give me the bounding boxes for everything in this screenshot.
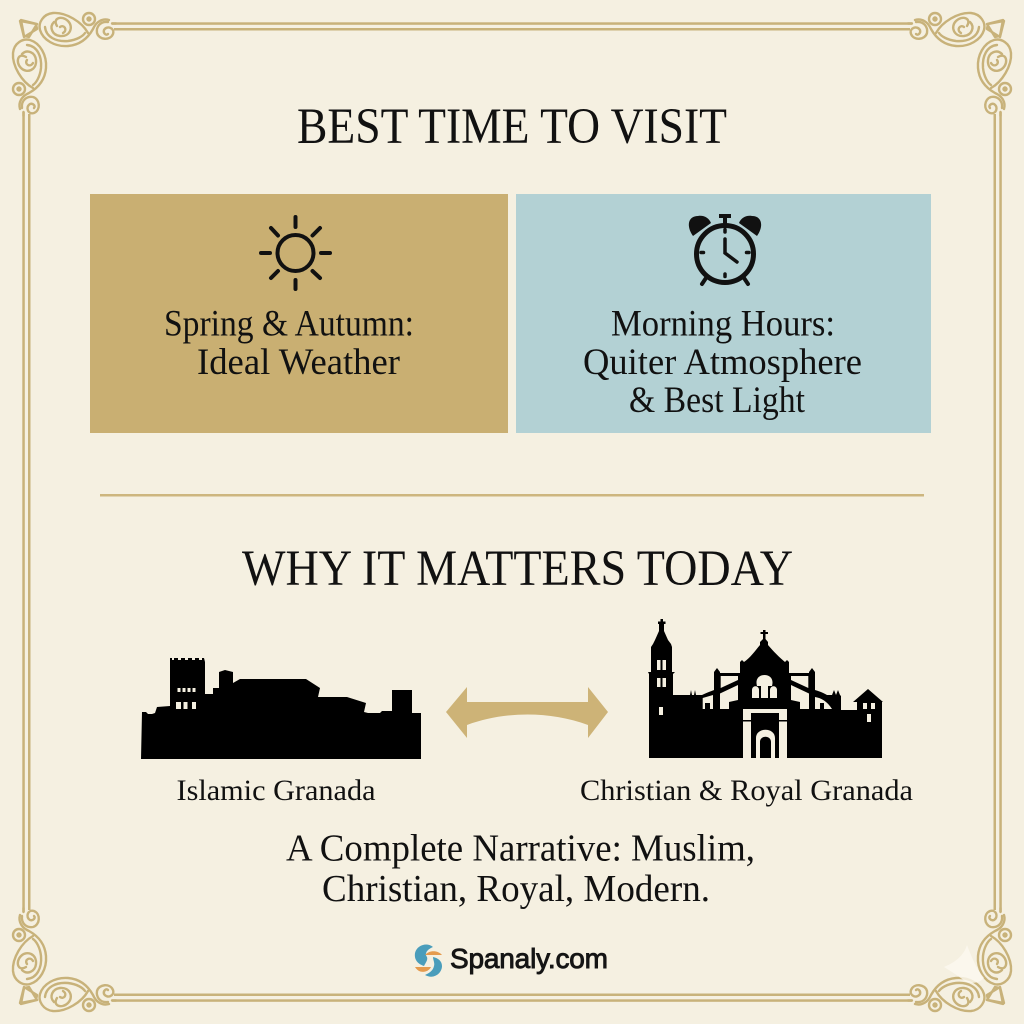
logo text: Spanaly.com	[450, 943, 608, 974]
icon: sun	[261, 217, 330, 289]
gate frame	[743, 709, 787, 758]
panel text: spring and autumn: Spring & Autumn:	[164, 304, 414, 344]
tower windows	[657, 660, 666, 715]
label: islamic granada: Islamic Granada	[176, 775, 376, 807]
text block: complete narrative	[286, 828, 755, 910]
panel text: spring and autumn: Ideal Weather	[197, 342, 400, 383]
icon: alarm clock	[689, 214, 761, 284]
panel text: morning hours	[583, 304, 862, 421]
text block: complete narrative: Christian, Royal, Modern.	[322, 868, 710, 910]
panel text: morning hours: Morning Hours:	[611, 304, 835, 344]
title: best time to visit: BEST TIME TO VISIT	[297, 99, 727, 155]
silhouette: islamic granada	[141, 658, 421, 759]
silhouette: christian and royal granada	[648, 619, 883, 758]
label: christian and royal granada: Christian & Royal Granada	[580, 775, 913, 807]
rose window and lancets	[756, 675, 773, 698]
panel text: morning hours: & Best Light	[629, 380, 806, 421]
text block: complete narrative: A Complete Narrative: Muslim,	[286, 828, 755, 870]
panel text: morning hours: Quiter Atmosphere	[583, 342, 862, 383]
panel: spring and autumn	[90, 194, 508, 433]
buttress openings	[721, 676, 738, 688]
arrow: two-way connection	[446, 687, 608, 738]
logo: spanaly.com	[415, 943, 608, 977]
house windows	[863, 703, 875, 722]
panel text: spring and autumn	[164, 304, 414, 383]
panel: morning hours	[516, 194, 931, 433]
heading: why it matters today: WHY IT MATTERS TODAY	[242, 541, 793, 597]
icon: logo mark	[415, 945, 442, 977]
section divider	[100, 494, 924, 496]
